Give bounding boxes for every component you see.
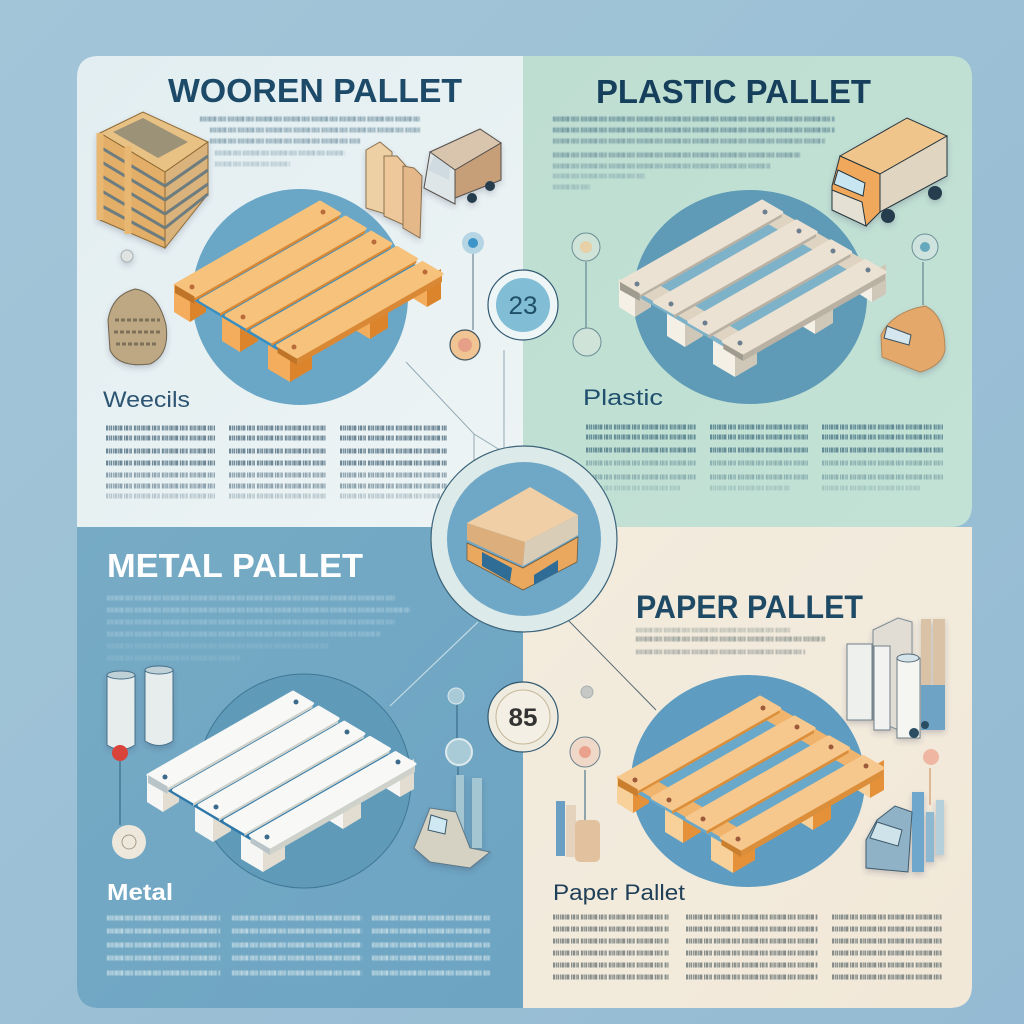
text block: wooden intro [200, 119, 420, 164]
text columns: wooden [106, 428, 447, 496]
subheading: metal: Metal [107, 879, 173, 905]
heading: paper pallet: PAPER PALLET [636, 589, 863, 625]
panel: plastic pallet [523, 56, 972, 527]
text columns: metal [107, 918, 490, 973]
icon: red marker with node [112, 745, 146, 859]
pallet: plastic [619, 201, 886, 377]
badge: 85: 85 [508, 704, 538, 732]
icon: bars and cylinder [556, 770, 600, 862]
icon: plastic truck [832, 118, 947, 226]
heading: plastic pallet: PLASTIC PALLET [596, 73, 871, 110]
icon: wooden boards [366, 142, 422, 238]
connector lines [406, 350, 504, 460]
icon: paper rolls [847, 618, 945, 738]
badge: 85 [488, 682, 558, 752]
icon: stacked pallets [100, 112, 208, 248]
icon: plastic nodes [572, 233, 938, 356]
pallet: metal [147, 692, 415, 872]
text block: plastic intro [553, 119, 835, 187]
badge: 23 [488, 270, 558, 340]
icon: paper truck with bars [866, 792, 944, 872]
text columns: paper [553, 917, 943, 977]
text block: metal intro [107, 598, 410, 658]
badge: 23: 23 [508, 292, 538, 320]
icon: right nodes [446, 688, 472, 790]
connector line [390, 622, 478, 706]
circle behind metal pallet [197, 674, 411, 888]
icon: boxed pallet [467, 487, 578, 590]
circle behind paper pallet [631, 675, 865, 887]
subheading: plastic: Plastic [583, 385, 663, 410]
panel: paper pallet [523, 527, 972, 1008]
icon: forklift [414, 775, 490, 868]
subheading: paper pallet: Paper Pallet [553, 880, 685, 905]
panel: metal pallet [77, 527, 523, 1008]
text columns: plastic [586, 427, 943, 488]
circle behind wooden pallet [192, 189, 408, 405]
heading: wooden pallet: WOOREN PALLET [168, 72, 462, 109]
icon: stone sample [108, 250, 167, 365]
circle behind plastic pallet [633, 190, 867, 404]
subheading: woods: Weecils [103, 387, 190, 412]
panel: wooden pallet [77, 56, 523, 527]
connector line [568, 620, 656, 710]
icon: node pair [450, 232, 484, 360]
center badge with box icon [431, 446, 617, 632]
pallet: wooden [174, 202, 442, 382]
pallet: paper [617, 697, 884, 873]
icon: cylinders [107, 666, 173, 750]
icon: plastic van [881, 306, 945, 372]
text block: paper intro [636, 630, 825, 652]
heading: metal pallet: METAL PALLET [107, 547, 363, 584]
icon: paper nodes [570, 686, 939, 805]
icon: wooden truck [424, 129, 501, 204]
